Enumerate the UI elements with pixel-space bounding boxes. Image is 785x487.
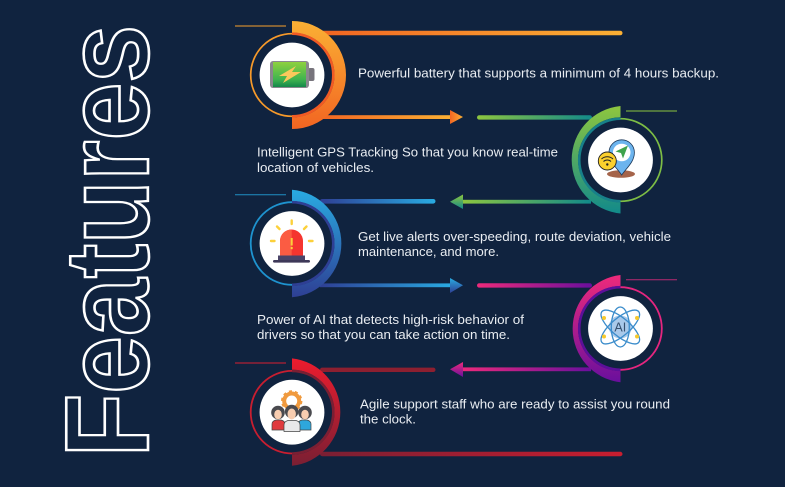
ring: [579, 119, 662, 201]
crescent: [572, 106, 620, 214]
text: Intelligent GPS Tracking So that you know real-time: [257, 144, 558, 160]
text: Agile support staff who are ready to assist you round: [360, 396, 670, 412]
top bar: [320, 31, 622, 35]
text: Get live alerts over-speeding, route deviation, vehicle: [358, 229, 671, 244]
icon: battery: [270, 61, 314, 88]
panel: battery feature: [235, 21, 719, 129]
crescent: [292, 190, 341, 297]
short accent line: [235, 362, 286, 364]
icon: AI atom: [596, 305, 644, 349]
bottom bar: [320, 452, 622, 456]
short accent line: [235, 25, 286, 27]
panel: live alerts feature: [235, 190, 671, 297]
text: maintenance, and more.: [358, 244, 499, 259]
white disc: [588, 296, 653, 361]
icon: AI atom: AI: [614, 320, 626, 334]
text: Power of AI that detects high-risk behavior of: [257, 312, 524, 327]
text: the clock.: [360, 412, 416, 426]
crescent: [292, 358, 340, 466]
white disc: [260, 211, 324, 276]
text: drivers so that you can take action on time.: [257, 327, 510, 342]
white disc: [260, 43, 324, 107]
white disc: [588, 128, 653, 192]
short accent line: [235, 194, 286, 196]
text: Powerful battery that supports a minimum of 4 hours backup.: [358, 66, 719, 80]
text: [257, 144, 558, 175]
crescent: [573, 275, 620, 382]
panel: GPS feature: [257, 106, 677, 214]
top bar: [477, 115, 592, 120]
top bar: [320, 199, 436, 204]
icon: siren: [271, 220, 312, 263]
panel: support staff feature: [235, 358, 670, 466]
white disc: [260, 380, 324, 445]
icon: support team: [271, 392, 312, 432]
short accent line: [626, 110, 677, 112]
icon: location pin with wifi: [598, 140, 635, 178]
ring: [251, 202, 333, 285]
bottom arrow: [320, 278, 463, 293]
bottom arrow: [320, 110, 463, 124]
bottom arrow: [450, 194, 591, 209]
text: [360, 396, 670, 426]
crescent: [292, 21, 346, 129]
bottom arrow: [450, 362, 591, 377]
ring: [579, 287, 662, 370]
top bar: [320, 368, 436, 372]
ring: [251, 371, 333, 454]
panel: AI feature: [257, 275, 677, 382]
short accent line: [626, 279, 677, 281]
text: [257, 312, 524, 342]
top bar: [477, 283, 592, 288]
ring: [251, 34, 333, 116]
text: location of vehicles.: [257, 160, 374, 175]
text: [358, 229, 671, 259]
